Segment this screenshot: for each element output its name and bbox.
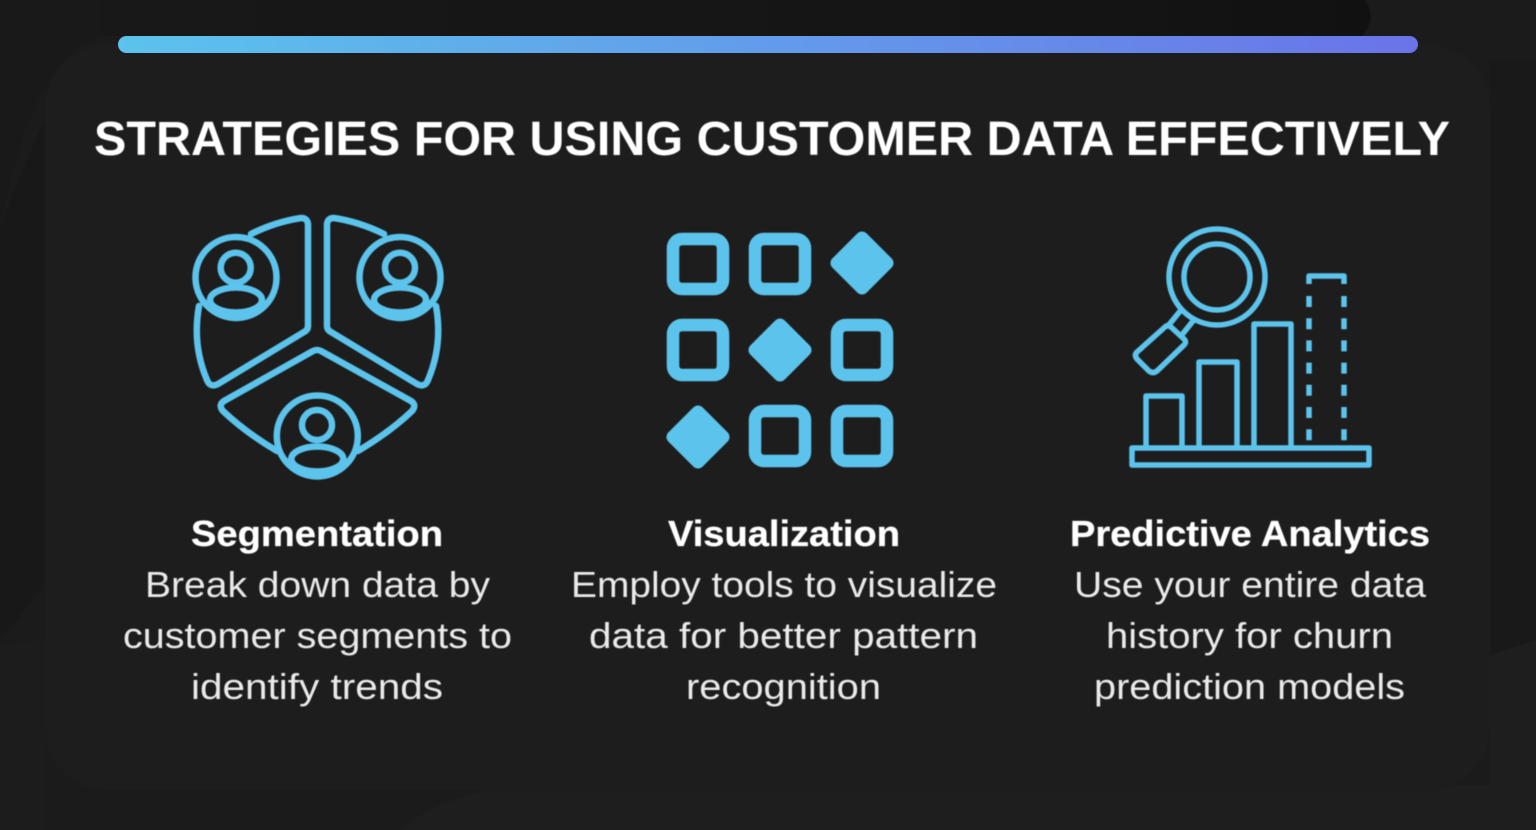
text: visualization description: recognition (686, 666, 881, 707)
heading: Segmentation: Segmentation (191, 513, 443, 554)
text: predictive analytics description: prediction models (1094, 666, 1405, 707)
panel: visualization (571, 238, 997, 707)
text: segmentation description: identify trends (191, 666, 443, 707)
heading: Visualization: Visualization (668, 513, 900, 554)
title: STRATEGIES FOR USING CUSTOMER DATA EFFECTIVELY (94, 113, 1450, 166)
panel: predictive analytics (1070, 229, 1430, 707)
text: predictive analytics description (1074, 564, 1427, 707)
icon: grid of squares and diamonds (673, 238, 887, 462)
text: segmentation description (123, 564, 512, 707)
text: predictive analytics description: Use your entire data (1074, 564, 1427, 605)
text: segmentation description: customer segments to (123, 615, 512, 656)
heading: Predictive Analytics: Predictive Analytics (1070, 513, 1430, 554)
text: predictive analytics description: history for churn (1106, 615, 1393, 656)
panel: segmentation (123, 218, 512, 707)
icon: segmented shield with three users (196, 218, 440, 476)
gradient top bar (118, 36, 1418, 53)
icon: magnifier over bar chart (1132, 229, 1369, 465)
text: visualization description: data for better pattern (589, 615, 978, 656)
text: visualization description (571, 564, 997, 707)
text: segmentation description: Break down data by (145, 564, 490, 605)
text: visualization description: Employ tools to visualize (571, 564, 997, 605)
